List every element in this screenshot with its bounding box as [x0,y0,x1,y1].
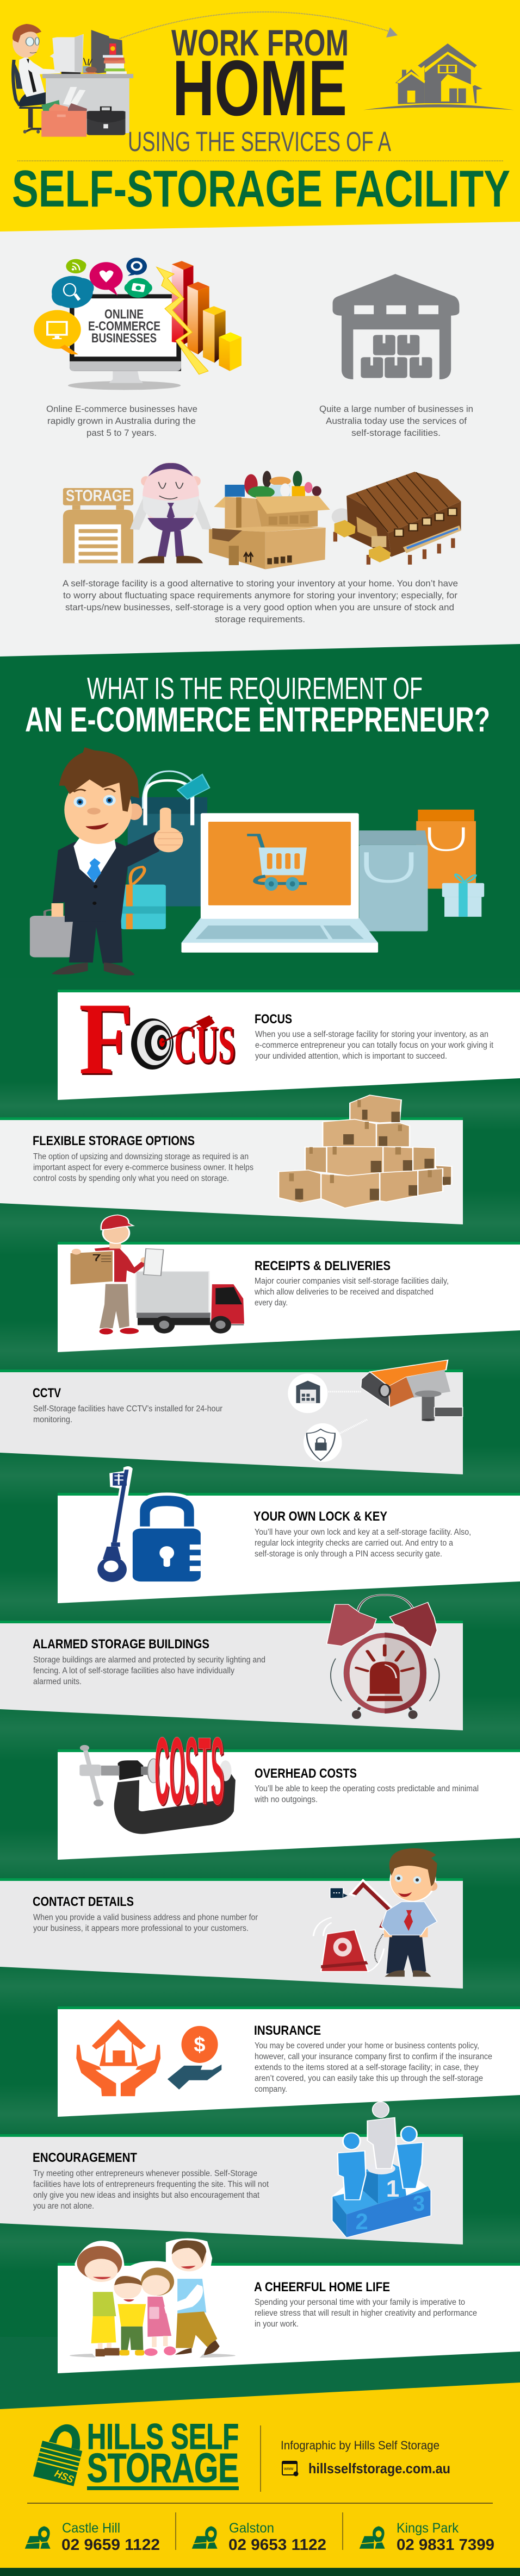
illustration: online e-commerce monitor [34,258,242,390]
location: castle hill: Castle Hill [62,2521,120,2536]
heading: FOCUS [255,1012,292,1027]
body text: facilities have lots of entrepreneurs frequenting the site. This will not [33,2180,269,2189]
laptop [182,813,378,953]
gift box [121,867,166,929]
icon: hands protecting house [76,2019,160,2096]
body text [33,1152,253,1183]
body text: monitoring. [33,1415,72,1424]
body text: only give you new ideas and insights but also encouragement that [33,2191,260,2200]
icon: warehouse with boxes [333,274,459,379]
icon: map pin [25,2526,51,2549]
body text [33,2169,269,2211]
telephone [313,1883,391,1972]
heading: OVERHEAD COSTS [255,1766,357,1781]
body text: every day. [255,1298,288,1308]
body text: you are not alone. [33,2202,94,2211]
illustration: focus target lettering: F [80,984,134,1098]
text block: self-storage alternative: storage requirements. [215,615,305,624]
footer [0,2383,520,2576]
screen text: E-COMMERCE [88,319,160,334]
pale blue shopping bag [359,830,428,931]
illustration: entrepreneur with laptop and shopping bags [30,747,484,976]
body text [254,1784,479,1804]
body text: aren’t covered, you can easily take this up through the self-storage [255,2074,483,2083]
icon: storage building badge [288,1373,327,1413]
body text [33,1913,258,1933]
illustration: wooden warehouse [332,472,461,565]
panel: your own lock and key [58,1466,520,1603]
logo badge text: HSS [53,2468,76,2486]
illustration: alarm clock [327,1595,439,1719]
logo wordmark: STORAGE [87,2445,239,2491]
father [164,2240,220,2355]
body text: When you provide a valid business address and phone number for [33,1913,258,1922]
body text: The option of upsizing and downsizing storage as required is an [33,1152,249,1161]
panel: alarmed storage buildings [0,1595,463,1730]
heading: ENCOURAGEMENT [33,2150,137,2165]
man [381,1848,437,1977]
entrepreneur character [30,747,183,976]
text block: businesses using self-storage [319,404,473,438]
subtitle: using the services of a: USING THE SERVICES OF A [128,126,391,157]
icon: coin over hand: $ [194,2034,206,2056]
body text [255,2298,477,2329]
footer yellow background [0,2383,520,2568]
icon: house [363,43,514,110]
text block: e-commerce growth: rapidly grown in Australia during the [47,416,196,426]
body text: You may be covered under your home or business contents policy, [255,2041,479,2050]
text block: e-commerce growth: past 5 to 7 years. [86,428,157,438]
body text: with no outgoings. [254,1795,318,1804]
credit text: Infographic by Hills Self Storage [281,2439,439,2452]
body text: You’ll have your own lock and key at a self-storage facility. Also, [255,1528,471,1537]
illustration: focus target lettering: F [79,982,133,1096]
illustration: focus target lettering: CUS [174,1014,235,1074]
body text: control costs by spending only what you need on storage. [33,1174,229,1183]
body text: Try meeting other entrepreneurs whenever possible. Self-Storage [33,2169,257,2178]
body text: Storage buildings are alarmed and protected by security lighting and [33,1655,265,1665]
heading: A CHEERFUL HOME LIFE [254,2280,390,2294]
panel: contact details [0,1848,463,1989]
storage sign text: STORAGE [66,487,131,505]
title: home: HOME [172,44,347,132]
body text: fencing. A lot of self-storage facilities also have individually [33,1666,234,1675]
body text: your business, it appears more professional to your customers. [33,1924,249,1933]
illustration: man working at desk [13,24,133,137]
location: kings park: 02 9831 7399 [397,2536,494,2554]
title: work from: WORK FROM [171,22,349,64]
illustration: padlock and key [97,1466,201,1582]
text block: businesses using self-storage: Quite a large number of businesses in [319,404,473,414]
small gift box [442,874,484,917]
truck [136,1272,245,1334]
illustration: cctv camera and security icons [288,1360,463,1462]
body text [255,1030,494,1061]
text block: self-storage alternative: A self-storage facility is a good alternative to storing your inventory at your home. You don’t have [63,579,458,589]
text block: self-storage alternative: to worry about fluctuating space requirements anymore for storing your inventory; especially, for [63,591,458,601]
body text: regular lock integrity checks are carried out. And entry to a [255,1539,453,1548]
icon: speech bubble [330,1888,348,1898]
intro section [34,258,473,624]
panel: receipts and deliveries [58,1215,520,1352]
screen text: BUSINESSES [91,331,157,346]
location: galston [192,2521,326,2554]
girl [141,2267,176,2356]
logo: hills self storage [33,2416,239,2491]
dark shopping bag [128,771,209,906]
panel: insurance [58,2006,520,2117]
illustration: focus target lettering: CUS [175,1016,237,1076]
location: castle hill [25,2521,160,2554]
courier [70,1215,164,1335]
text block: e-commerce growth: Online E-commerce businesses have [46,404,197,414]
icon: map pin [360,2526,385,2549]
illustration: happy family [70,2239,236,2358]
text block: self-storage alternative [63,579,458,624]
body text: Self-Storage facilities have CCTV’s installed for 24-hour [33,1404,222,1414]
panel: cctv [0,1360,463,1474]
body text: extends to the items stored at a self-storage facility; in case, they [255,2063,479,2072]
panel: a cheerful home life [58,2239,520,2373]
boy [114,2275,146,2355]
panel: flexible storage options [0,1095,463,1224]
body text: e-commerce entrepreneur you can totally focus on your work giving it [255,1041,494,1050]
dotted arc arrow from desk to house [120,12,398,39]
body text [254,1277,449,1308]
location: kings park: Kings Park [397,2521,459,2536]
icon: website [282,2461,298,2476]
body text [255,1528,471,1559]
illustration: man with red telephone [313,1848,437,1977]
panel: overhead costs: COSTS [154,1718,224,1824]
body text: You’ll be able to keep the operating costs predictable and minimal [255,1784,479,1793]
icon: website: www [283,2466,294,2471]
icon: map pin [192,2526,218,2549]
heading: ALARMED STORAGE BUILDINGS [33,1637,209,1652]
illustration: clamp squeezing costs [79,1718,236,1834]
location: galston: 02 9653 1122 [228,2536,326,2554]
heading: FLEXIBLE STORAGE OPTIONS [33,1134,195,1148]
podium number 2: 2 [355,2209,368,2234]
body text [255,2041,492,2094]
logo wordmark: HILLS SELF [87,2416,239,2456]
illustration: storage building [63,487,133,563]
panel: overhead costs [58,1718,520,1860]
podium number 3: 3 [413,2192,425,2216]
text block: e-commerce growth [46,404,197,438]
body text [33,1655,265,1686]
body text [33,1404,222,1424]
body text: relieve stress that will result in higher creativity and performance [255,2309,477,2318]
heading: INSURANCE [254,2023,321,2038]
body text: which allow deliveries to be received and dispatched [254,1287,434,1297]
panel: overhead costs: COSTS [156,1720,225,1826]
text block: businesses using self-storage: self-storage facilities. [351,428,441,438]
text block: self-storage alternative: start-ups/new businesses, self-storage is a very good option when you are unsure of stock and [65,603,454,612]
body text: your undivided attention, which is important to succeed. [255,1052,447,1061]
body text: in your work. [255,2319,299,2329]
panel: focus [58,982,520,1100]
icon: coin over hand [168,2026,221,2090]
heading: CONTACT DETAILS [33,1895,134,1909]
header section [0,0,520,232]
heading: YOUR OWN LOCK & KEY [253,1509,387,1524]
heading: CCTV [33,1386,61,1400]
panel: encouragement [0,2102,463,2244]
podium number 1: 1 [386,2175,399,2202]
illustration: courier with delivery truck [70,1215,245,1335]
section heading: requirement of an e-commerce entrepreneur [25,671,490,739]
body text: Major courier companies visit self-storage facilities daily, [255,1277,449,1286]
illustration: podium with three figures [333,2102,430,2237]
body text: important aspect for every e-commerce business owner. It helps [33,1163,253,1172]
location: galston: Galston [229,2521,274,2536]
body text: alarmed units. [33,1677,82,1686]
orange shopping bag [416,810,476,889]
mother [77,2246,122,2356]
body text: self-storage is only through a PIN access security gate. [255,1549,442,1559]
heading: RECEIPTS & DELIVERIES [255,1259,391,1273]
illustration: businessman character [130,462,212,563]
text block: businesses using self-storage: Australia today use the services of [326,416,467,426]
body text: When you use a self-storage facility for storing your inventory, as an [255,1030,488,1039]
logo padlock [33,2424,82,2486]
location: castle hill: 02 9659 1122 [61,2536,160,2554]
body text: Spending your personal time with your family is imperative to [255,2298,465,2307]
illustration: focus target lettering [79,982,237,1098]
body text: however, call your insurance company first to confirm if the insurance [255,2052,492,2061]
yellow header background [0,0,520,232]
location: kings park [360,2521,494,2554]
body text: company. [255,2085,287,2094]
illustration: cardboard boxes with goods [209,471,330,570]
screen text: ONLINE [104,307,144,322]
icon: shield lock badge [304,1423,342,1462]
icon: camera [361,1360,463,1421]
website address: hillsselfstorage.com.au [308,2460,450,2477]
illustration: pile of cardboard boxes [278,1095,451,1208]
